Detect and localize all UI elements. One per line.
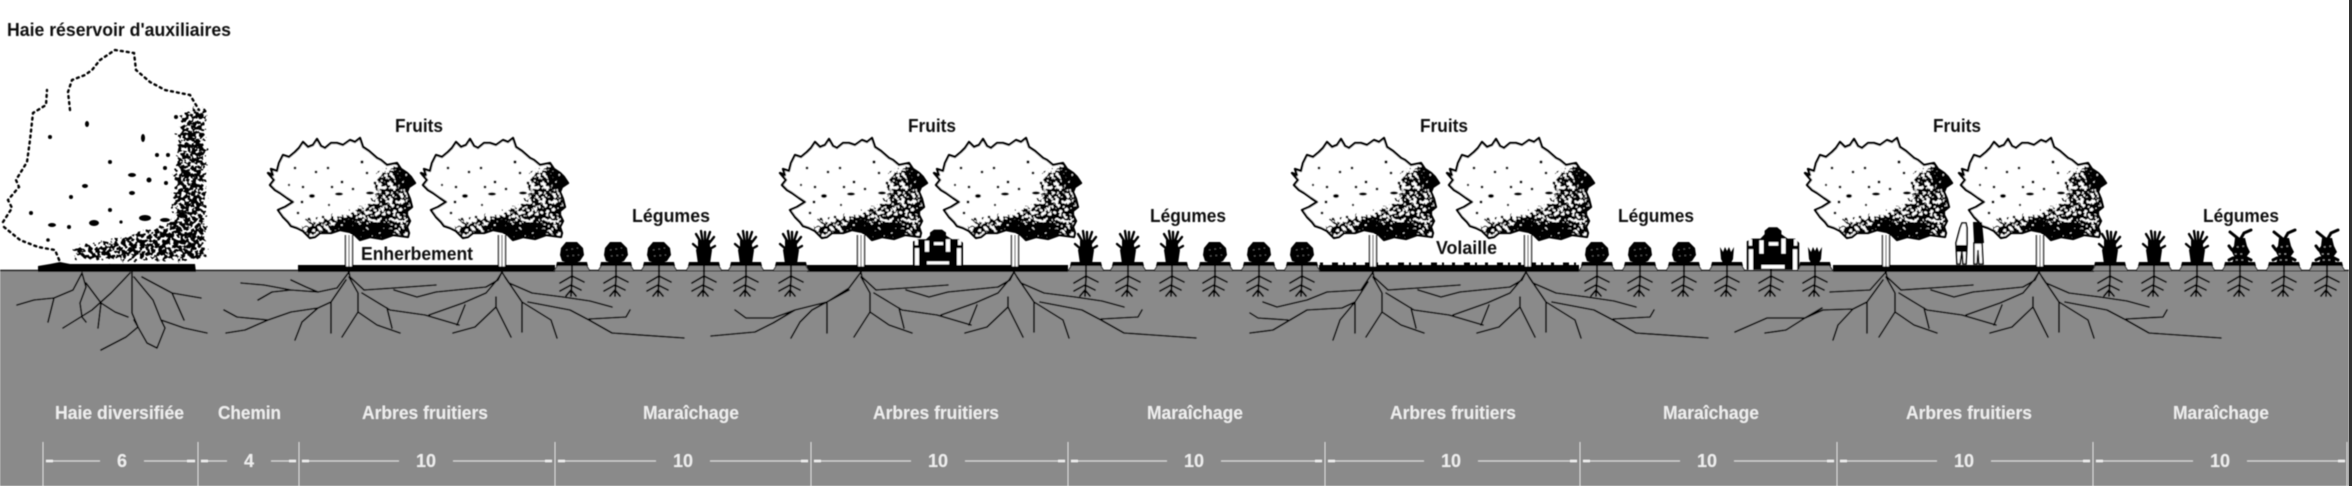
dimension: 10: 10 xyxy=(1954,451,1974,471)
label: fruits 4: Fruits xyxy=(1933,116,1981,136)
dimension: 10: 10 xyxy=(928,451,948,471)
fruit trees row 1 xyxy=(268,138,572,267)
zone label: path: Chemin xyxy=(218,403,281,423)
two people picking fruit xyxy=(1956,222,1984,264)
roots: fruit tree row 1 xyxy=(224,272,684,340)
vegetable row 2 xyxy=(1068,231,1320,296)
zone label: fruit trees 3: Arbres fruitiers xyxy=(1390,403,1516,423)
label: vegetables 2: Légumes xyxy=(1150,206,1226,226)
dimension: 10: 10 xyxy=(1697,451,1717,471)
title: hedge label: Haie réservoir d'auxiliaires xyxy=(7,20,231,40)
zone label: fruit trees 4: Arbres fruitiers xyxy=(1906,403,2032,423)
zone label: market gardening 3: Maraîchage xyxy=(1663,403,1759,423)
roots: fruit tree row 3 xyxy=(1250,272,1708,340)
dimension: 10: 10 xyxy=(416,451,436,471)
roots: fruit tree row 2 xyxy=(711,272,1196,338)
zone label: diversified hedge: Haie diversifiée xyxy=(55,403,184,423)
label: poultry: Volaille xyxy=(1436,238,1497,258)
zone label: market gardening 1: Maraîchage xyxy=(643,403,739,423)
label: grass cover: Enherbement xyxy=(361,244,473,264)
roots: fruit tree row 4 xyxy=(1735,272,2221,340)
fruit trees row 2 xyxy=(780,138,1085,267)
vegetable row 1 xyxy=(554,231,809,296)
label: fruits 1: Fruits xyxy=(395,116,443,136)
label: fruits 3: Fruits xyxy=(1420,116,1468,136)
hedge foliage xyxy=(3,50,208,272)
zone label: fruit trees 2: Arbres fruitiers xyxy=(873,403,999,423)
dimension: 4: 4 xyxy=(244,451,254,471)
zone label: market gardening 2: Maraîchage xyxy=(1147,403,1243,423)
hedge roots xyxy=(17,272,207,350)
right edge strip xyxy=(2349,0,2352,486)
zone label: market gardening 4: Maraîchage xyxy=(2173,403,2269,423)
vegetable row 3 xyxy=(1579,242,1833,296)
label: fruits 2: Fruits xyxy=(908,116,956,136)
fruit trees row 4 xyxy=(1805,138,2110,267)
vegetable row 4 xyxy=(2092,230,2345,296)
dimension: 10: 10 xyxy=(1184,451,1204,471)
soil cross-section xyxy=(0,270,2349,486)
label: vegetables 3: Légumes xyxy=(1618,206,1694,226)
label: vegetables 1: Légumes xyxy=(632,206,710,226)
dimension: 10: 10 xyxy=(1441,451,1461,471)
dimension lines with end arrows xyxy=(43,442,2347,486)
tractor on path between vegetables xyxy=(1747,227,1799,269)
dimension: 10: 10 xyxy=(673,451,693,471)
dimension: 10: 10 xyxy=(2210,451,2230,471)
grass strips under fruit trees xyxy=(298,264,2094,272)
label: vegetables 4: Légumes xyxy=(2203,206,2279,226)
zone label: fruit trees 1: Arbres fruitiers xyxy=(362,403,488,423)
fruit trees row 3 xyxy=(1292,138,1598,267)
tractor in orchard row 2 xyxy=(913,230,963,265)
dimension: 6: 6 xyxy=(117,451,127,471)
